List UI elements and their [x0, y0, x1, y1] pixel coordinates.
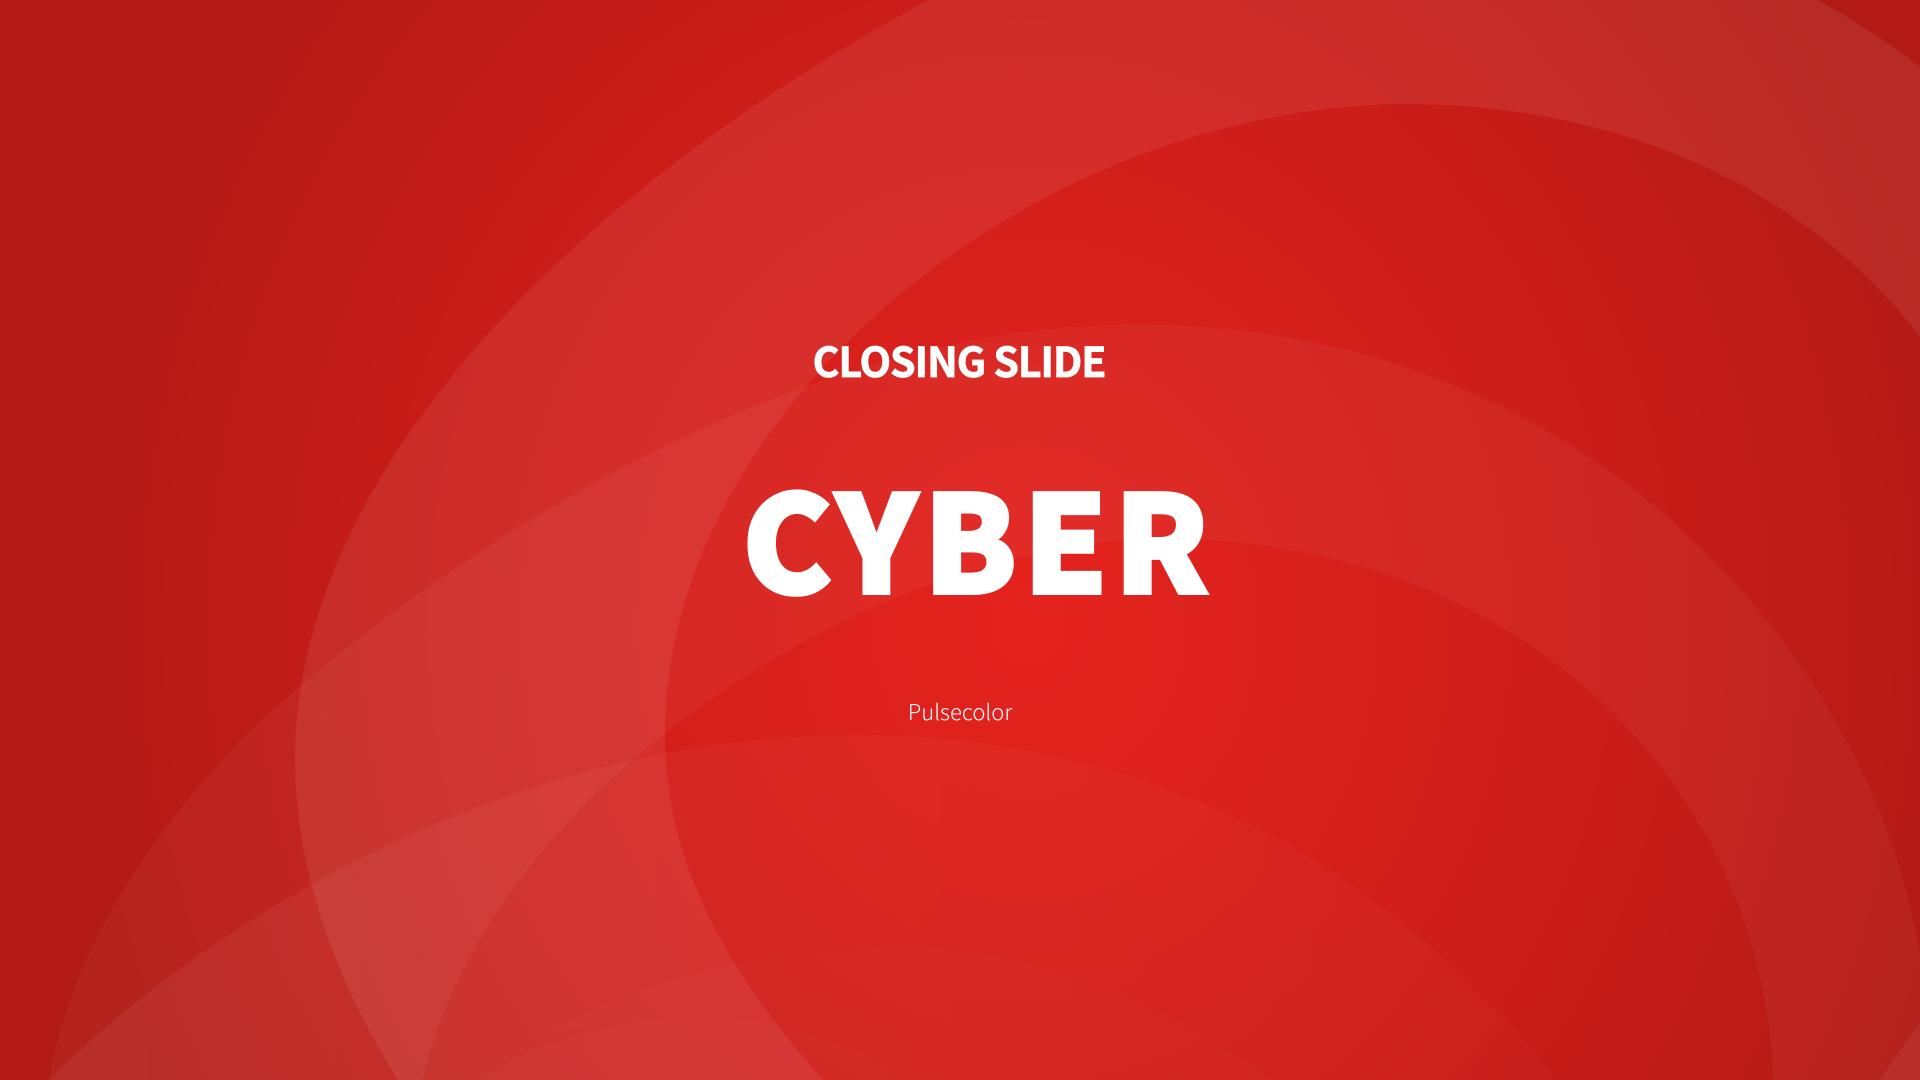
swoosh: middle band [49, 324, 1920, 1080]
swoosh: bottom right corner [1880, 1022, 1920, 1080]
swoosh: faint arc [527, 945, 1273, 1080]
eyebrow heading: CLOSING SLIDE [813, 329, 1105, 389]
swoosh: bottom fold [478, 1016, 924, 1080]
main title: CYBER [742, 438, 1216, 632]
swoosh: lower band [49, 735, 1555, 1080]
subtitle: Pulsecolor [908, 695, 1012, 727]
